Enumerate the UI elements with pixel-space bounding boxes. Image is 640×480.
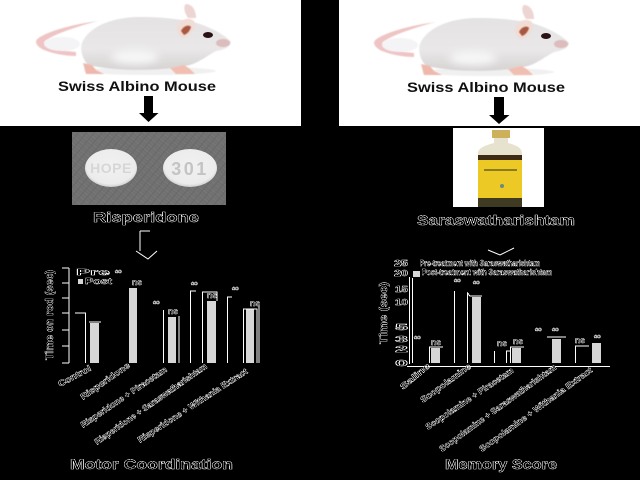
y axis tick labels: 3 (395, 334, 409, 344)
arrow: right outline (488, 248, 514, 255)
y axis tick labels: 15 (395, 284, 408, 294)
tablet: 301 (163, 149, 217, 187)
y axis tick labels: 25 (394, 258, 408, 268)
significance marks: ns (497, 338, 507, 348)
chart: memory score (378, 258, 610, 454)
significance marks: ns (431, 337, 441, 347)
heading: left drug: Risperidone (93, 209, 199, 225)
bars (431, 297, 601, 363)
x axis labels: Scopolamine + Piracetam (424, 365, 516, 432)
y axis tick labels: 2 (395, 344, 409, 354)
y axis tick labels: 20 (394, 268, 408, 278)
x axis labels (398, 360, 594, 454)
y axis title: Time (sec) (378, 282, 390, 344)
significance marks: ns (168, 306, 178, 316)
y axis (62, 268, 69, 363)
y axis tick labels: 0 (395, 358, 409, 368)
significance marks (115, 268, 260, 316)
panel: right mouse (339, 0, 640, 126)
axes (407, 277, 610, 366)
bottle cap (492, 130, 510, 138)
x axis labels: Risperidone + Withania Extract (136, 366, 249, 445)
bar outlines (430, 291, 589, 363)
legend: Pre-treatment with Saraswatharishtam (420, 258, 540, 268)
y axis tick labels (394, 258, 409, 368)
x axis labels: Scopolamine (418, 361, 473, 405)
heading: right drug: Saraswatharishtam (417, 212, 575, 228)
panel: tonic bottle photo (453, 128, 544, 207)
significance marks: ns (132, 277, 142, 287)
x axis labels: Scopolamine + Withania Extract (477, 365, 594, 454)
significance marks: ns (575, 335, 585, 345)
bottle label (478, 155, 522, 207)
legend: Post (85, 276, 112, 286)
icon: right white mouse (374, 5, 569, 76)
bar outlines (75, 291, 259, 363)
y axis title: Time on rod (sec) (44, 270, 56, 360)
significance marks: ** (594, 333, 601, 343)
legend (76, 267, 112, 286)
arrow: left mouse to drug (139, 96, 158, 122)
significance marks: ** (153, 299, 160, 309)
x axis labels: Scopolamine + Saraswatharishtam (437, 362, 558, 454)
legend (413, 258, 552, 277)
significance marks: ** (191, 280, 198, 290)
x axis labels: Control (56, 363, 93, 389)
legend: Pre (76, 267, 111, 277)
chart caption: motor coordination: Motor Coordination (70, 456, 233, 472)
tablet: HOPE: HOPE (90, 160, 132, 176)
y axis tick labels: 10 (395, 297, 408, 307)
x axis labels: Saline (398, 360, 432, 392)
chart caption: memory score: Memory Score (445, 456, 557, 472)
significance marks: ** (414, 334, 421, 344)
significance marks: ns (207, 290, 217, 300)
x axis labels: Risperidone + Saraswatharishtam (92, 361, 209, 447)
right mouse label: Swiss Albino Mouse (407, 80, 566, 95)
x axis labels: Risperidone + Piracetam (79, 364, 169, 430)
left mouse label: Swiss Albino Mouse (58, 79, 217, 94)
bars (90, 288, 254, 363)
arrow: right mouse to drug (489, 97, 510, 124)
tablet: 301: 301 (171, 159, 209, 179)
significance marks (414, 277, 601, 348)
significance marks: ** (232, 285, 239, 295)
x axis labels (56, 360, 249, 447)
chart: motor coordination (44, 267, 260, 447)
panel: left mouse (0, 0, 301, 126)
significance marks: ns (250, 298, 260, 308)
significance marks: ** (552, 326, 559, 336)
significance marks: ** (535, 326, 542, 336)
panel: tablets photo (72, 132, 226, 205)
arrow: left outline (136, 231, 157, 259)
tablet: HOPE (85, 149, 137, 187)
significance marks: ** (454, 277, 461, 287)
x axis labels: Risperidone (78, 360, 132, 402)
significance marks: ns (513, 336, 523, 346)
y axis tick labels: 5 (395, 322, 409, 332)
significance marks: ** (473, 279, 480, 289)
significance marks: ** (115, 268, 122, 278)
icon: left white mouse (36, 4, 231, 75)
bottle body (478, 138, 522, 207)
legend: Post-treatment with Saraswatharishtam (422, 267, 552, 277)
